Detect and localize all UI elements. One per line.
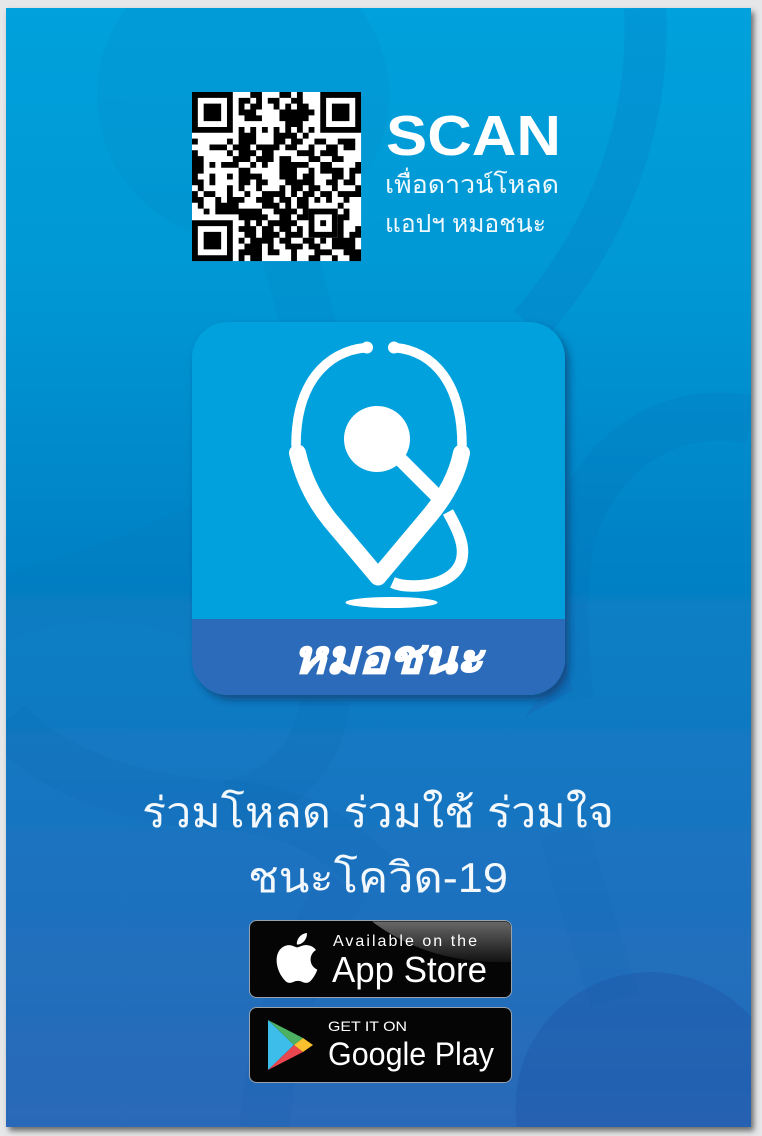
name band xyxy=(192,619,565,695)
slogan: ร่วมโหลด ร่วมใช้ ร่วมใจ xyxy=(142,788,614,836)
Google Play badge xyxy=(250,1008,512,1082)
QR code xyxy=(192,92,361,261)
slogan xyxy=(142,788,614,901)
App Store label: Available on the xyxy=(333,933,477,950)
name band: หมอชนะ xyxy=(293,631,485,683)
icon: apple xyxy=(277,933,317,983)
slogan: ชนะโควิด-19 xyxy=(248,853,508,901)
scan instructions: แอปฯ หมอชนะ xyxy=(385,210,546,238)
scan instructions: เพื่อดาวน์โหลด xyxy=(385,167,559,199)
icon: play triangle xyxy=(268,1020,313,1070)
Google Play label xyxy=(328,1018,494,1072)
Google Play label: Google Play xyxy=(328,1036,494,1072)
app icon tile xyxy=(192,322,565,695)
App Store label: App Store xyxy=(332,949,487,990)
icon: stethoscope location pin xyxy=(296,342,463,608)
App Store badge xyxy=(250,920,512,998)
Google Play label: GET IT ON xyxy=(328,1018,407,1034)
scan instructions xyxy=(385,167,559,238)
scan heading: SCAN xyxy=(386,104,561,168)
